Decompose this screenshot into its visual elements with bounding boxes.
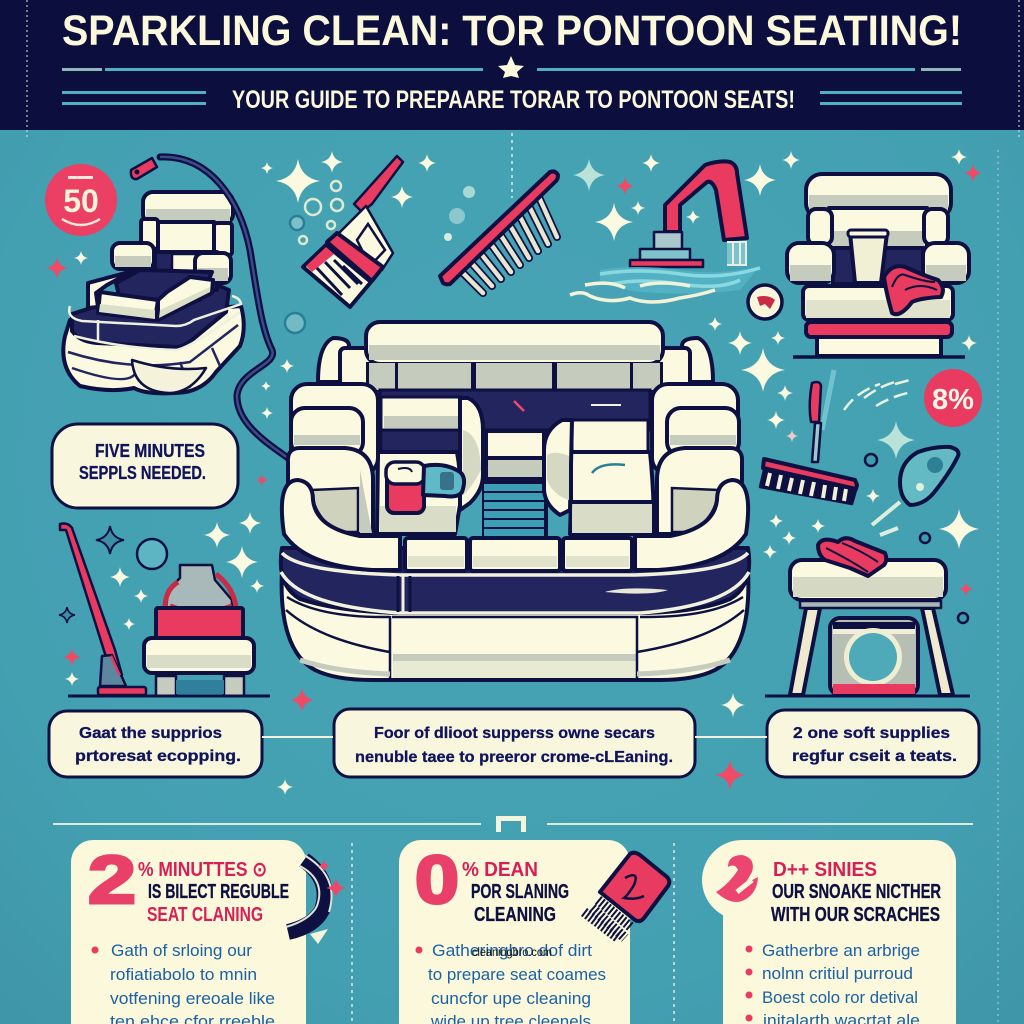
card 3 bullets: Boest colo ror detival xyxy=(762,988,918,1007)
deck band xyxy=(72,284,229,347)
card 2 heading: CLEANING xyxy=(474,904,556,926)
header banner xyxy=(0,0,1024,140)
left armchair xyxy=(282,384,400,570)
card 2 bullets: Gatheringbro dof dirt xyxy=(432,941,592,960)
card 2 xyxy=(399,840,669,1024)
card 1 bullets: Gath of srloing our xyxy=(111,941,252,960)
subtitle: YOUR GUIDE TO PREPAARE TORAR TO PONTOON SEATS! xyxy=(232,86,795,114)
card 3 heading xyxy=(771,859,941,926)
callout: soft supplies: regfur cseit a teats. xyxy=(792,748,957,765)
badge: 50: 50 xyxy=(63,183,99,219)
sparkles xyxy=(46,149,982,795)
illustration: spray bottle xyxy=(872,447,958,535)
watermark text: cleaningbro.com xyxy=(472,947,552,959)
right armchair xyxy=(635,384,748,570)
card 3 bullets xyxy=(746,941,920,1024)
callout: gather supplies xyxy=(49,711,262,777)
center steps xyxy=(482,430,548,540)
illustration: hand brush xyxy=(303,156,403,307)
back top cushion xyxy=(366,322,663,364)
illustration: pontoon boat with seats and hose xyxy=(63,157,298,465)
card 1 heading xyxy=(138,859,289,926)
illustration: seat with cup and towel xyxy=(787,174,969,357)
callout: five minutes: SEPPLS NEEDED. xyxy=(79,463,206,483)
hull xyxy=(282,570,748,680)
card 2 brush icon xyxy=(584,853,669,938)
subtitle rules xyxy=(62,91,962,105)
front cushions xyxy=(405,538,632,571)
navy hull band xyxy=(281,548,749,617)
seat back xyxy=(143,192,233,224)
illustration: long scrub brush xyxy=(440,171,558,293)
back row panels xyxy=(366,362,663,392)
card 1 bullets: votfening ereoale like xyxy=(110,989,275,1008)
seat cushions xyxy=(116,270,212,300)
card 3 xyxy=(702,840,956,1024)
card 1 heading: IS BILECT REGUBLE xyxy=(148,881,289,903)
card 3 heading: D++ SINIES xyxy=(773,859,877,881)
card 3 bullets: Gatherbre an arbrige xyxy=(762,941,920,960)
illustration: push broom xyxy=(760,370,857,504)
card 3 bullets: nolnn critiul purroud xyxy=(762,964,913,983)
hose xyxy=(160,157,298,465)
callout: center text xyxy=(334,709,695,777)
title: SPARKLING CLEAN: TOR PONTOON SEATIING! xyxy=(62,7,962,55)
card 1 xyxy=(71,840,346,1024)
callout: gather supplies: prtoresat ecopping. xyxy=(75,748,241,765)
callout: five minutes xyxy=(52,424,238,508)
card 2 number: 0 xyxy=(415,842,459,918)
card 1 heading: SEAT CLANING xyxy=(147,904,263,926)
illustration: stool with towel and machine xyxy=(765,538,970,696)
teal sponge xyxy=(423,465,464,496)
towel xyxy=(884,266,943,314)
card 2 bullets xyxy=(416,941,606,1024)
card 3 heading: WITH OUR SCRACHES xyxy=(771,904,940,926)
callout: soft supplies xyxy=(767,710,979,777)
star divider xyxy=(62,56,961,78)
card 3 heading: OUR SNOAKE NICTHER xyxy=(772,881,941,903)
callout: center text: nenuble taee to preeror crome-cLEaning. xyxy=(355,749,673,766)
card 2 bullets: cuncfor upe cleaning xyxy=(431,989,591,1008)
left inner seat xyxy=(381,397,461,430)
card 2 heading xyxy=(462,859,569,926)
illustration: supply basket on bench xyxy=(68,565,270,696)
bubbles xyxy=(137,181,968,623)
badge: 8%: 8% xyxy=(932,384,974,416)
callout: gather supplies: Gaat the supprios xyxy=(79,725,222,742)
illustration: faucet and water xyxy=(570,161,760,302)
card 2 heading: % DEAN xyxy=(462,859,538,881)
pontoon floats xyxy=(63,306,244,393)
small towel badge xyxy=(748,285,782,319)
card 2 heading: POR SLANING xyxy=(471,881,569,903)
hose nozzle xyxy=(131,158,157,179)
card 2 bullets: to prepare seat coames xyxy=(428,965,606,984)
section divider xyxy=(53,816,973,832)
side posts xyxy=(318,338,349,382)
badge: 8% xyxy=(924,369,982,427)
motion dashes xyxy=(844,380,912,410)
card 1 bullets xyxy=(92,941,275,1024)
badge: 50 xyxy=(45,164,117,236)
illustration: stick cleaner xyxy=(60,524,146,695)
right inner seat xyxy=(572,420,648,453)
card 1 striped icon xyxy=(286,855,346,944)
arm cushions xyxy=(112,243,154,269)
washer xyxy=(830,618,918,695)
card 1 heading: % MINUTTES ⊙ xyxy=(138,859,267,881)
navy back band xyxy=(380,390,650,430)
card 1 number: 2 xyxy=(88,842,136,918)
red can xyxy=(386,462,425,513)
callout: soft supplies: 2 one soft supplies xyxy=(793,725,950,742)
callout: center text: Foor of dlioot supperss owne secars xyxy=(374,725,655,742)
cup xyxy=(848,230,888,283)
callout: five minutes: FIVE MINUTES xyxy=(95,441,205,461)
central pontoon seating illustration xyxy=(281,322,749,680)
card 3 number xyxy=(716,855,758,902)
card 1 bullets: rofiatiabolo to mnin xyxy=(110,965,257,984)
stool towel xyxy=(818,538,886,576)
